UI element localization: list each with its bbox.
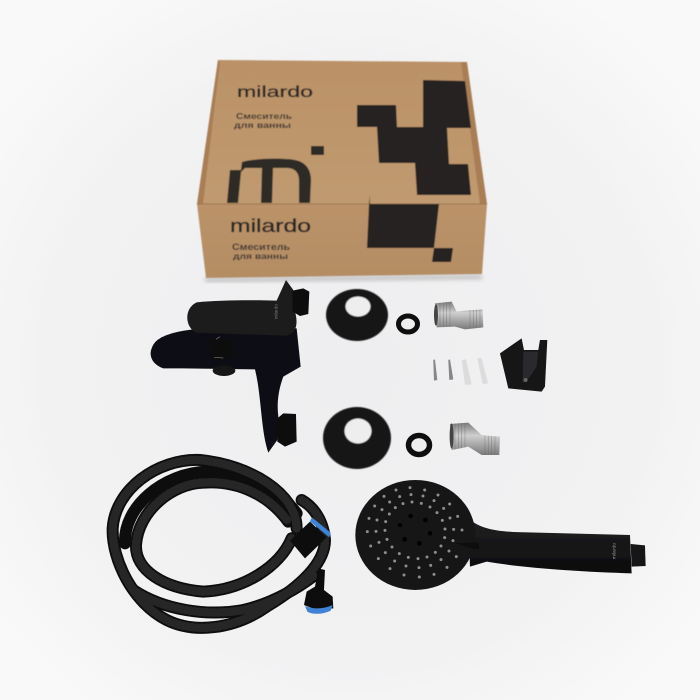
big m letter: [227, 159, 311, 203]
upper adapter: [434, 302, 483, 329]
diverter knob: [209, 338, 234, 361]
cardboard box: для ванны: [234, 120, 291, 130]
screws and dowels: [433, 358, 488, 385]
lower escutcheon: [323, 407, 391, 469]
hand shower: [355, 480, 646, 590]
box front face: [197, 204, 487, 278]
hose upper connector: [290, 517, 331, 558]
cardboard box: [197, 60, 487, 282]
cardboard box: для ванны: [233, 251, 288, 261]
handle logo: milardo: [611, 543, 617, 559]
hose holder: [500, 338, 547, 392]
caption on top: Смеситель: [236, 111, 292, 121]
lower gasket: [408, 436, 430, 454]
faucet lever: [187, 280, 297, 336]
mode switch: [456, 542, 479, 549]
small square pattern: [432, 248, 453, 262]
logo on top: milardo: [237, 84, 313, 101]
shower head: [355, 480, 475, 590]
shower handle: [468, 518, 632, 573]
upper escutcheon: [326, 289, 388, 341]
faucet top nut: [293, 288, 309, 316]
logo on front: milardo: [230, 216, 311, 236]
logo square: [311, 146, 324, 155]
faucet: milardo: [274, 304, 279, 319]
caption on front: Смеситель: [232, 242, 291, 252]
shower connector: [631, 544, 646, 567]
hose lower connector: [304, 568, 333, 614]
faucet: [151, 280, 309, 453]
knob below spout: [213, 365, 235, 376]
box pattern top: [357, 80, 471, 248]
box top face: [197, 60, 487, 204]
shower nozzles: [366, 486, 463, 578]
faucet spout and body: [151, 327, 301, 453]
faucet bottom nut: [277, 413, 297, 447]
lower adapter: [450, 423, 500, 455]
upper gasket: [398, 316, 418, 332]
center jets: [398, 514, 432, 546]
shower hose: [113, 460, 325, 628]
